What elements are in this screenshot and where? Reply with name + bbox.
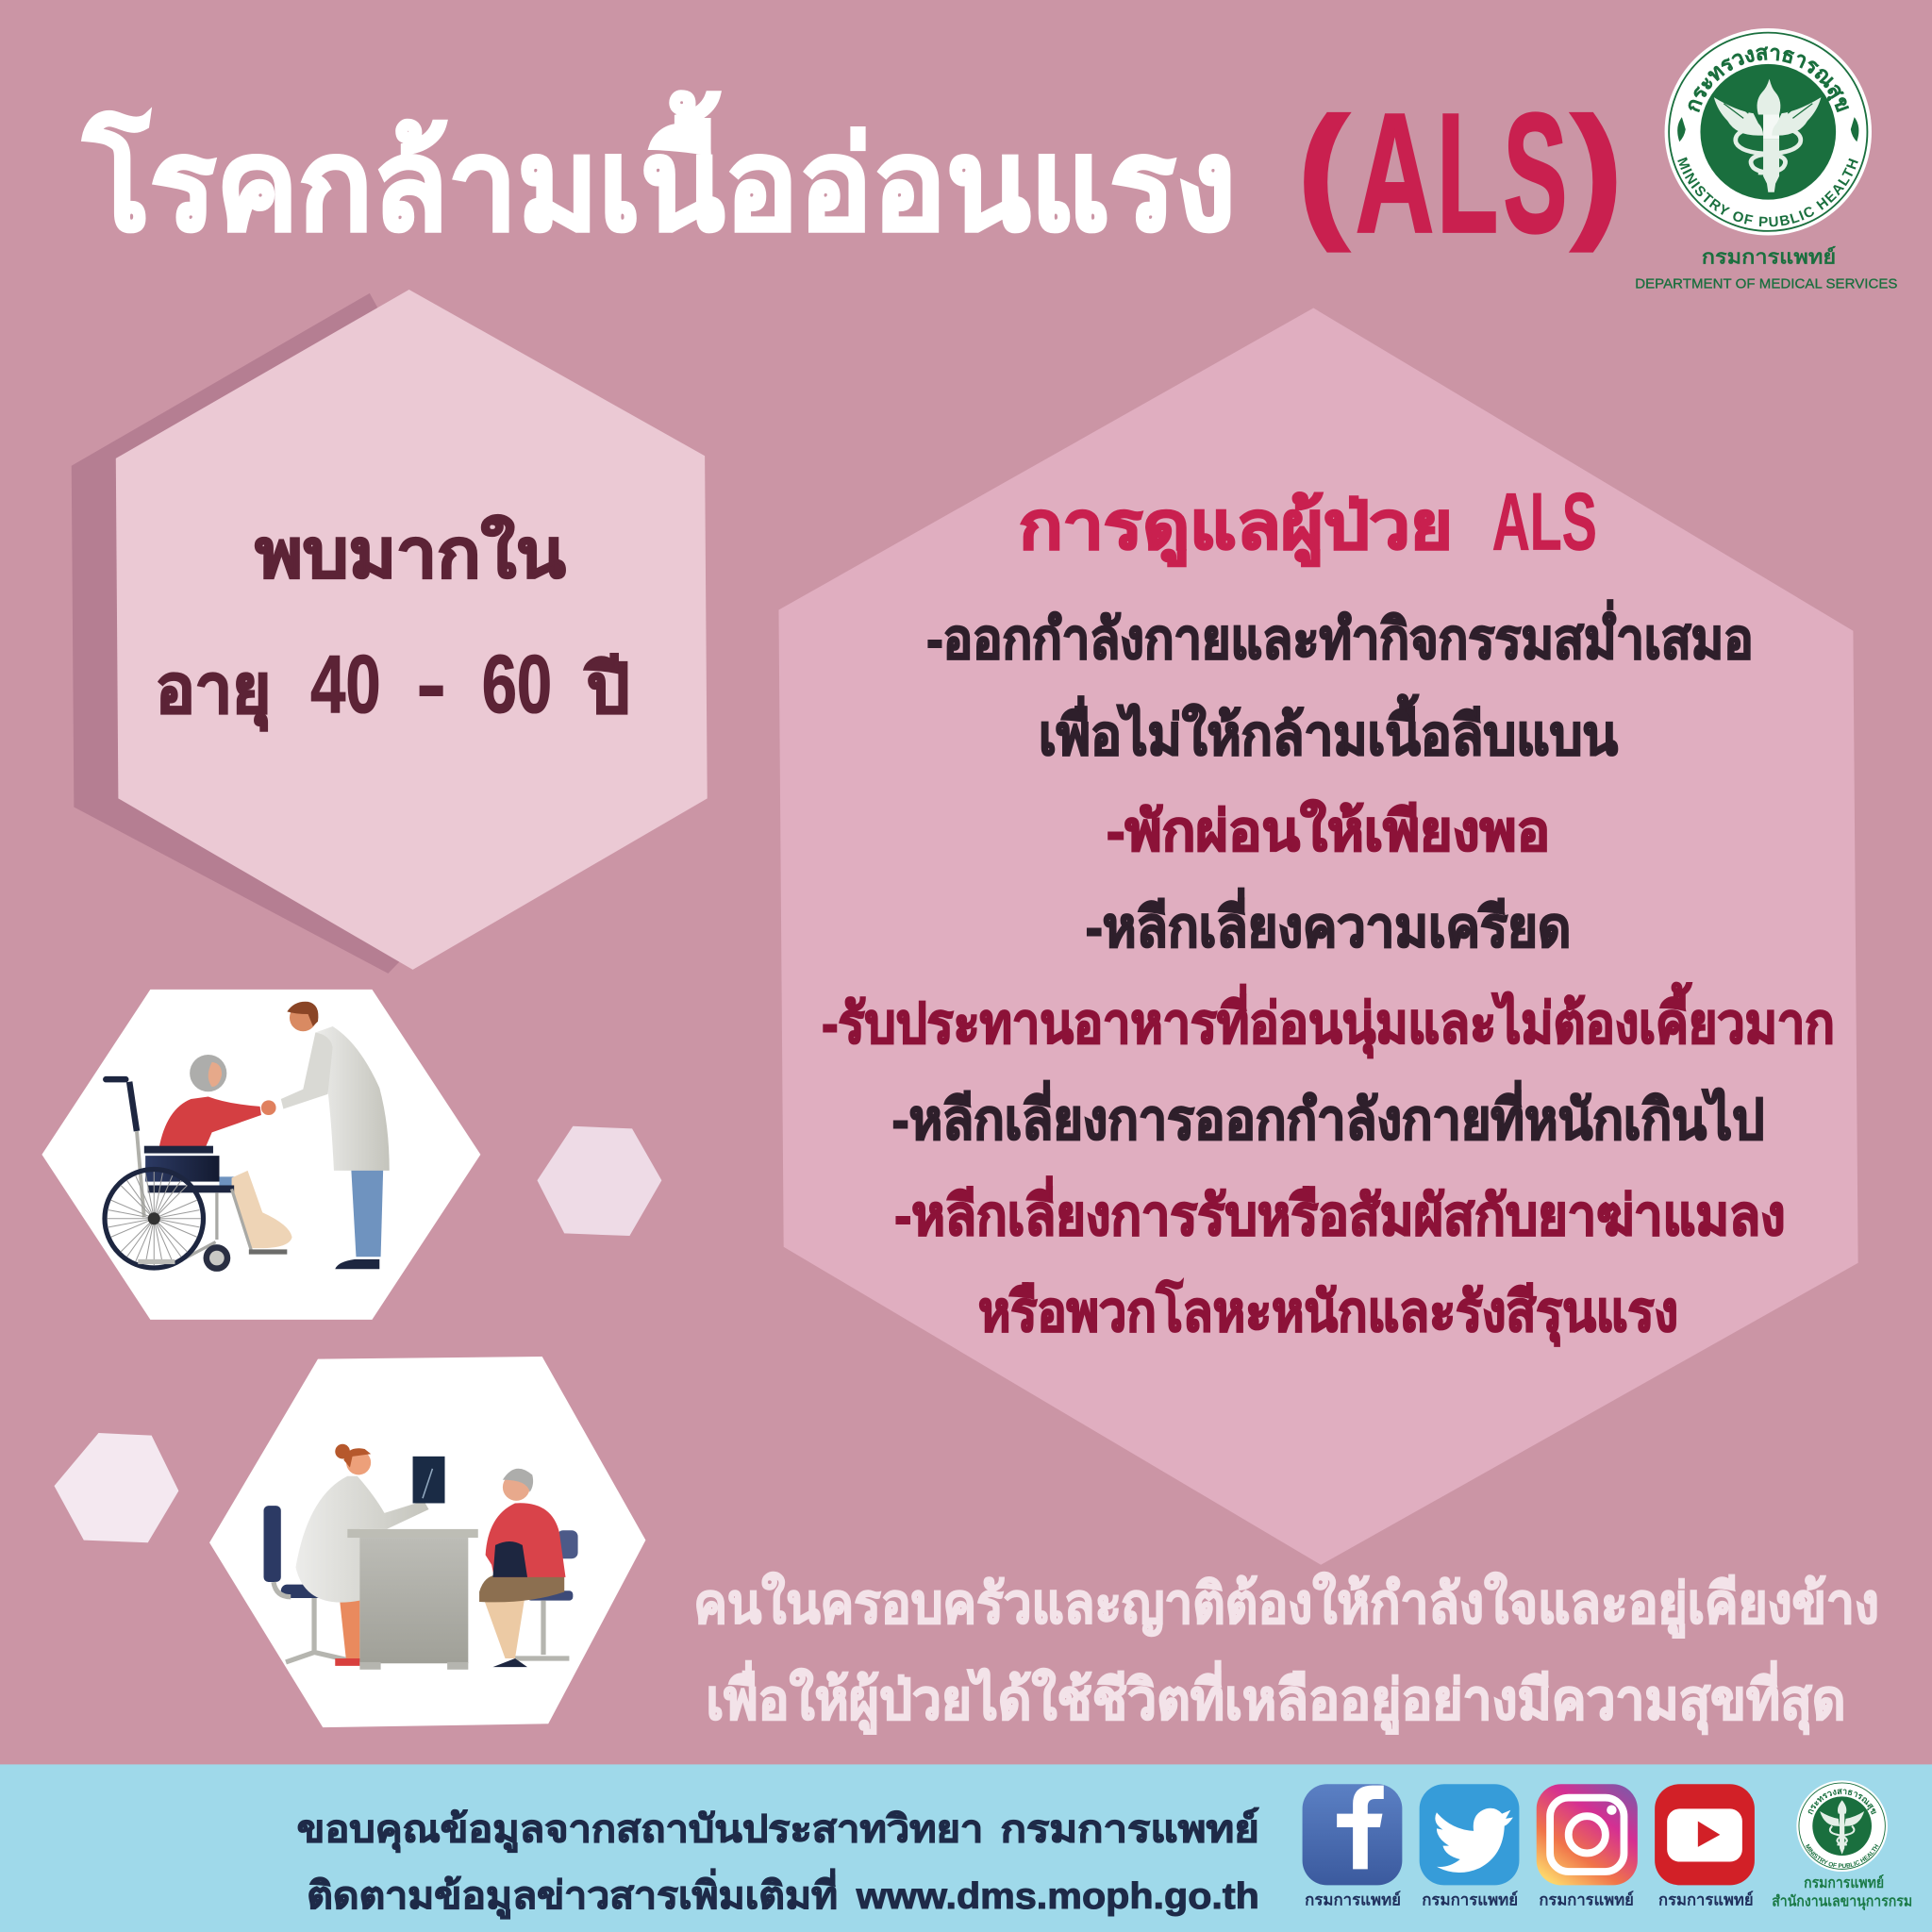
small logo caption: กรมการแพทย์ [1804,1874,1884,1891]
small logo [1796,1780,1888,1872]
patient chair [515,1530,578,1658]
seated doctor [295,1444,429,1666]
heading: caring for ALS patients [1019,477,1597,568]
small logo: MINISTRY OF PUBLIC HEALTH [1806,1843,1879,1868]
wheelchair [105,1079,287,1272]
x-ray [413,1457,445,1503]
care list [822,600,1835,1347]
desk [347,1529,478,1670]
heading: caring for ALS patients: ALS [1492,477,1597,568]
text: age 40 - 60 [156,638,629,731]
care list: เพื่อไม่ให้กล้ามเนื้อลีบแบน [1039,694,1618,766]
social labels: กรมการแพทย์ [1305,1890,1401,1908]
social labels: กรมการแพทย์ [1658,1890,1754,1908]
footer band [0,1764,1932,1932]
care list: หรือพวกโลหะหนักและรังสีรุนแรง [978,1279,1678,1347]
icon: twitter [1420,1784,1519,1885]
text: age 40 - 60: ปี [584,652,629,727]
logo: Ministry of Public Health [1664,28,1872,236]
decorative small hexagon right [537,1126,661,1236]
footer credit text: กรมการแพทย์ [1001,1807,1259,1851]
patient in wheelchair [158,1055,292,1248]
care list: -หลีกเลี่ยงความเครียด [1086,889,1571,958]
title: ALS: ) [1571,88,1623,253]
text: family support message [693,1572,1879,1735]
care list: -หลีกเลี่ยงการออกกำลังกายที่หนักเกินไป [892,1081,1764,1151]
panel: wheelchair illustration [42,990,480,1320]
logo: Ministry of Public Health: MINISTRY OF PUBLIC HEALTH [1677,157,1858,226]
text: found mostly in: พบมากใน [255,513,566,591]
small logo caption [1772,1874,1912,1911]
care list: -หลีกเลี่ยงการรับหรือสัมผัสกับยาฆ่าแมลง [894,1177,1786,1247]
logo caption: department: กรมการแพทย์ [1702,246,1836,269]
title: ALS: A [1356,79,1434,269]
title: ALS: L [1437,79,1498,269]
text: age 40 - 60: อายุ [156,652,271,731]
panel: age hexagon shadow [72,293,616,974]
footer credit text [297,1807,1259,1920]
care list: -ออกกำลังกายและทำกิจกรรมสม่ำเสมอ [926,600,1754,670]
panel: age hexagon [116,290,708,970]
social labels [1305,1890,1754,1908]
footer credit text: ติดตามข้อมูลข่าวสารเพิ่มเติมที่ [307,1868,838,1920]
text: age 40 - 60: - [416,638,446,730]
title: ALS: S [1503,79,1567,269]
title [82,79,1623,269]
logo caption: department: DEPARTMENT OF MEDICAL SERVICES [1635,276,1897,292]
panel: care hexagon [778,308,1858,1565]
heading: caring for ALS patients: การดูแลผู้ป่วย [1019,489,1453,567]
logo: Ministry of Public Health: กระทรวงสาธารณสุข [1689,46,1849,113]
icon: facebook [1303,1784,1402,1885]
panel: consultation illustration [209,1357,645,1727]
care list: -รับประทานอาหารที่อ่อนนุ่มและไม่ต้องเคี้ยวมาก [822,983,1835,1058]
small logo: กระทรวงสาธารณสุข [1807,1789,1877,1815]
logo emblem [1714,79,1821,192]
small logo caption: สำนักงานเลขานุการกรม [1772,1893,1912,1911]
title: โรคกล้ามเนื้ออ่อนแรง [82,91,1236,257]
footer credit text: www.dms.moph.go.th [856,1876,1259,1917]
decorative small hexagon left [54,1433,178,1542]
logo caption: department [1635,246,1897,292]
title: ALS [1297,79,1623,269]
icon: youtube [1655,1784,1755,1885]
doctor [281,1002,390,1269]
text: age 40 - 60: 60 [482,638,552,730]
title: ALS: ( [1297,88,1350,253]
social labels: กรมการแพทย์ [1539,1890,1634,1908]
icon: instagram [1537,1784,1638,1885]
logo side ornaments [1677,117,1858,142]
social labels: กรมการแพทย์ [1422,1890,1518,1908]
footer credit text: ขอบคุณข้อมูลจากสถาบันประสาทวิทยา [297,1807,983,1854]
text: age 40 - 60: 40 [310,638,381,730]
doctor chair [264,1506,346,1662]
text: family support message: เพื่อให้ผู้ป่วยได้ใช้ชีวิตที่เหลืออยู่อย่างมีความสุขที่สุด [706,1661,1846,1735]
care list: -พักผ่อนให้เพียงพอ [1107,799,1550,862]
seated patient [479,1469,566,1667]
